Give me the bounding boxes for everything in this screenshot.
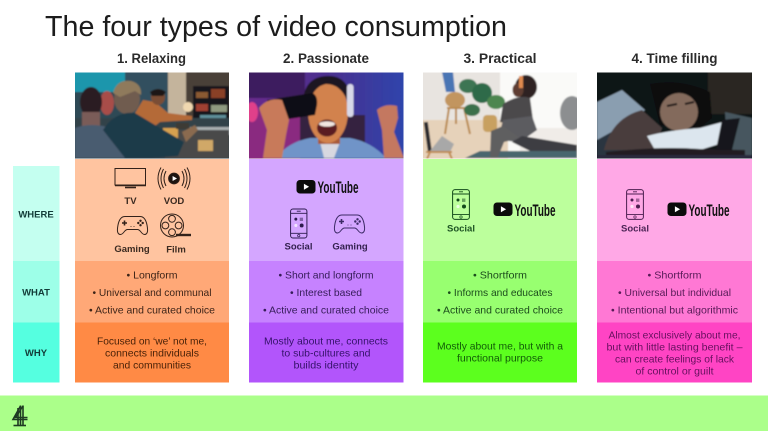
photo: woman doing yoga at home — [423, 72, 577, 158]
row label: where: WHERE — [18, 210, 54, 220]
footer band — [0, 396, 768, 431]
panel: time filling — [594, 68, 756, 382]
what block — [75, 261, 229, 322]
where block — [249, 159, 404, 261]
why text: of control or guilt — [636, 366, 714, 378]
what text: • Longform — [126, 270, 178, 282]
why text — [264, 336, 388, 372]
what text: • Universal but individual — [618, 287, 731, 299]
photo: man gaming on phone with headset — [249, 72, 404, 158]
row label column — [13, 166, 60, 382]
why text: to sub-cultures and — [282, 348, 371, 360]
what text: • Short and longform — [278, 270, 374, 282]
why text: Almost exclusively about me, — [608, 330, 740, 342]
label: gaming: Gaming — [332, 242, 368, 252]
why text: can create feelings of lack — [615, 354, 735, 366]
what block — [249, 261, 404, 322]
where block — [597, 159, 752, 261]
what block — [423, 261, 577, 322]
what text: • Active and curated choice — [437, 304, 563, 316]
why text: Mostly about me, but with a — [437, 340, 563, 352]
what text: • Active and curated choice — [263, 304, 389, 316]
label: TV: TV — [124, 196, 137, 207]
icon: social phone — [627, 190, 643, 219]
icon: social phone — [453, 190, 469, 219]
YouTube logo: YouTube — [318, 178, 358, 197]
icon: film — [160, 214, 191, 237]
what text — [263, 270, 389, 316]
why text: but with little lasting benefit – — [606, 342, 743, 354]
icon: social phone — [291, 209, 307, 238]
YouTube logo: YouTube — [688, 201, 730, 220]
what text: • Intentional but algorithmic — [611, 304, 738, 316]
panel: practical — [420, 68, 584, 382]
why text — [97, 336, 207, 372]
column headings — [117, 51, 718, 66]
photo: friends watching TV on sofa — [75, 72, 229, 158]
label: social: Social — [447, 224, 475, 234]
label: VOD: VOD — [164, 196, 184, 207]
what text: • Informs and educates — [448, 287, 552, 299]
what text: • Interest based — [290, 287, 362, 299]
what text — [611, 270, 738, 316]
title: The four types of video consumption — [45, 11, 507, 43]
label: social: Social — [621, 224, 649, 234]
why block — [423, 322, 577, 382]
what text: • Shortform — [648, 270, 702, 282]
where block — [75, 159, 229, 261]
why text: Focused on ‘we’ not me, — [97, 336, 207, 348]
label: gaming: Gaming — [114, 244, 150, 255]
YouTube logo — [296, 178, 358, 197]
photo: woman in bed looking at phone — [597, 72, 752, 158]
icon: VOD — [158, 168, 190, 190]
why text: functional purpose — [457, 352, 543, 364]
what text — [89, 270, 215, 316]
what text: • Shortform — [473, 270, 527, 282]
why text — [606, 330, 743, 378]
panel: relaxing — [70, 68, 235, 382]
YouTube logo: YouTube — [514, 201, 556, 220]
why block — [597, 322, 752, 382]
what text — [437, 270, 563, 316]
what block — [597, 261, 752, 322]
icon: TV — [115, 168, 146, 188]
why text: connects individuals — [105, 348, 199, 360]
why block — [249, 322, 404, 382]
row label: what: WHAT — [22, 288, 50, 298]
label: social: Social — [284, 242, 312, 252]
column headings: 4. Time filling — [632, 51, 718, 66]
why block — [75, 322, 229, 382]
icon: Channel 4 logo — [13, 406, 28, 426]
icon: gaming — [117, 216, 148, 234]
YouTube logo — [494, 201, 556, 220]
column headings: 1. Relaxing — [117, 51, 186, 66]
YouTube logo — [668, 201, 730, 220]
why text: builds identity — [294, 360, 359, 372]
panel: passionate — [245, 68, 410, 382]
icon: gaming — [334, 215, 365, 233]
why text: and communities — [113, 360, 191, 372]
why text — [437, 340, 563, 364]
what text: • Active and curated choice — [89, 304, 215, 316]
why text: Mostly about me, connects — [264, 336, 388, 348]
what text: • Universal and communal — [92, 287, 212, 299]
where block — [423, 159, 577, 261]
row label: why: WHY — [25, 348, 48, 359]
column headings: 3. Practical — [464, 51, 536, 66]
column headings: 2. Passionate — [283, 51, 369, 66]
label: film: Film — [166, 244, 186, 256]
